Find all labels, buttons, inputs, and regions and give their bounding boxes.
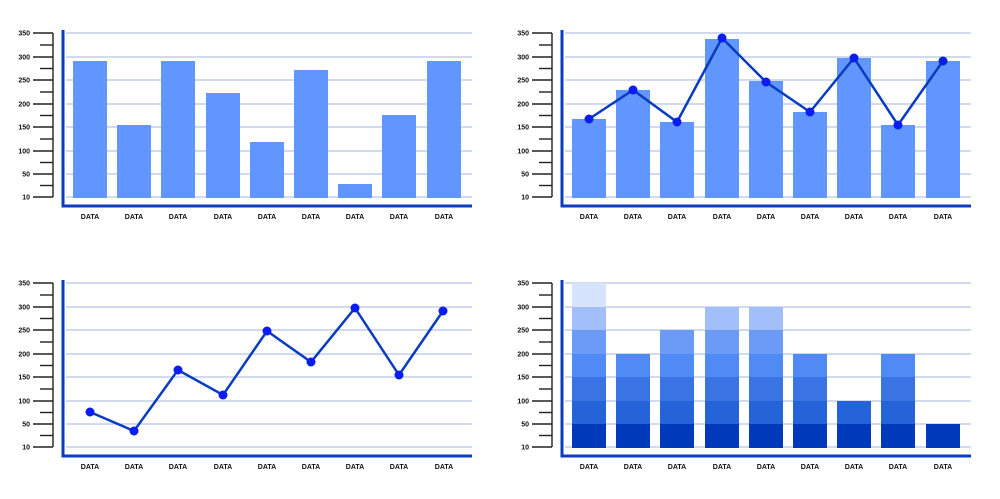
bar 2 xyxy=(616,354,650,448)
bar 1 xyxy=(572,283,606,448)
bar 3 xyxy=(660,330,694,448)
bar 7 xyxy=(837,401,871,448)
panel: bar and line chart top-right xyxy=(517,30,971,221)
bars xyxy=(572,283,960,448)
bar 8 xyxy=(881,354,915,448)
line series xyxy=(86,304,448,436)
bars xyxy=(572,39,960,198)
panel: bar chart top-left xyxy=(18,30,472,221)
panel: line chart bottom-left xyxy=(18,280,472,471)
bars xyxy=(73,61,461,198)
bar 4 xyxy=(705,307,739,448)
line series xyxy=(584,34,948,130)
bar 6 xyxy=(793,354,827,448)
panel: stacked gradient bar chart bottom-right xyxy=(517,280,971,471)
bar 9 xyxy=(926,424,960,448)
bar 5 xyxy=(749,307,783,448)
